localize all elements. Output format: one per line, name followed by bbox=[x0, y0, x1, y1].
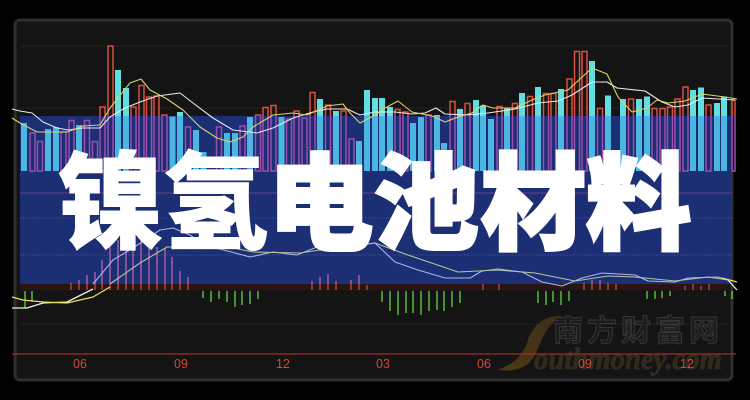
title: 池 bbox=[374, 120, 479, 272]
watermark Chinese name: 南方财富网 bbox=[553, 306, 723, 350]
title bbox=[58, 119, 691, 272]
title: 材 bbox=[481, 120, 586, 272]
watermark: southmoney logo bbox=[498, 306, 723, 376]
MACD histogram: red stubs below the band bbox=[71, 283, 709, 290]
MACD histogram: positive bars in band bbox=[71, 240, 709, 290]
watermark swoosh bbox=[498, 316, 562, 370]
time axis line bbox=[12, 353, 736, 355]
title: 氢 bbox=[163, 119, 268, 271]
MACD signal lines in the band bbox=[93, 228, 728, 286]
time axis labels: 12 bbox=[680, 357, 694, 371]
price moving average lines bbox=[12, 68, 737, 142]
volume bars inside the band bbox=[21, 116, 736, 172]
time axis labels: 09 bbox=[174, 357, 188, 371]
upper grid lines bbox=[20, 46, 728, 108]
title: 电 bbox=[268, 120, 373, 272]
time axis labels bbox=[73, 357, 694, 371]
time axis labels: 03 bbox=[376, 357, 390, 371]
blue title band bbox=[20, 116, 732, 284]
title: 料 bbox=[586, 120, 691, 272]
band grid lines bbox=[20, 193, 732, 255]
MACD zero line band bbox=[20, 284, 728, 290]
watermark domain: outhmoney.com bbox=[534, 341, 722, 376]
lower grid line bbox=[20, 323, 728, 325]
volume bars above the band bbox=[99, 45, 736, 116]
time axis labels: 06 bbox=[477, 357, 491, 371]
MACD histogram: negative green bars bbox=[25, 291, 732, 315]
MACD lines below the band bbox=[12, 278, 737, 308]
time axis labels: 06 bbox=[73, 357, 87, 371]
title: 镍 bbox=[58, 119, 163, 271]
time axis labels: 09 bbox=[578, 357, 592, 371]
time axis labels: 12 bbox=[276, 357, 290, 371]
